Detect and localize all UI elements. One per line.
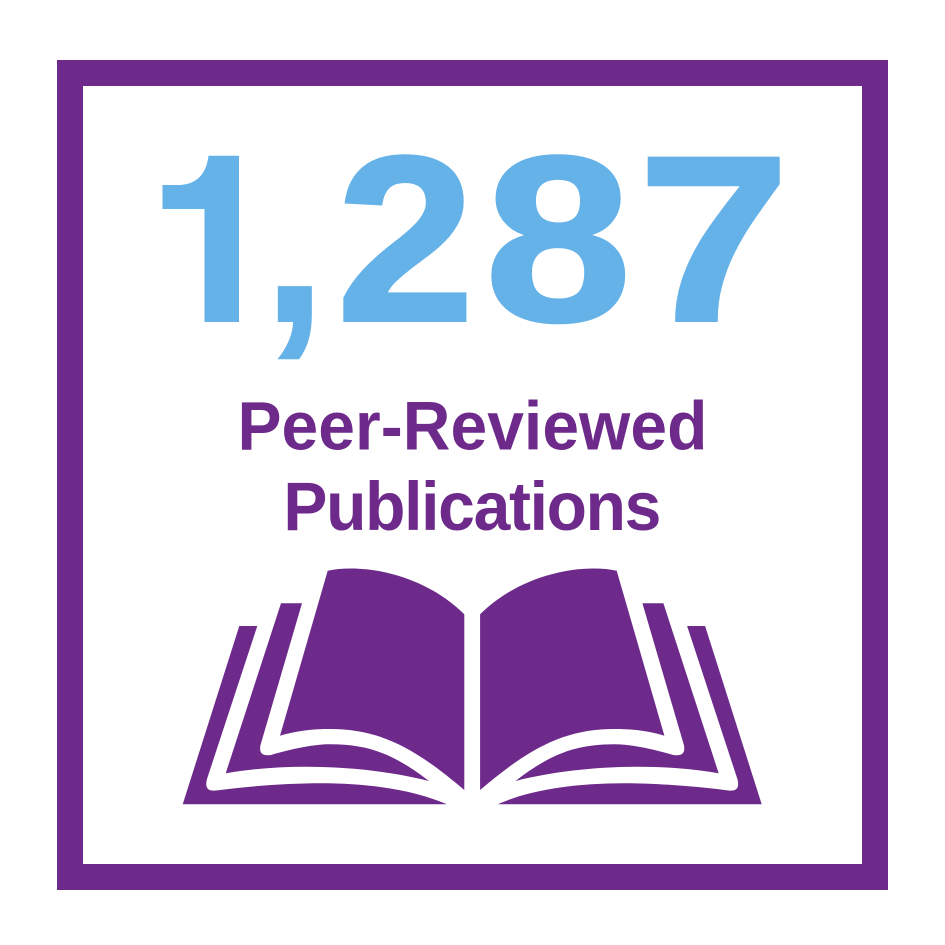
comma: , [261, 105, 328, 374]
left middle pages [226, 603, 429, 781]
left outer pages [183, 626, 447, 804]
panel: purple square frame [70, 73, 875, 877]
digit 1: 1 [150, 105, 284, 374]
left page [280, 568, 464, 790]
icon: open book [183, 568, 762, 804]
digit 7: 7 [638, 108, 790, 371]
infographic [57, 60, 888, 890]
digit 1 [162, 156, 239, 322]
digit 2: 2 [336, 107, 475, 371]
right pages [480, 568, 762, 804]
label: Publications: Publications [283, 469, 661, 545]
big number [162, 154, 780, 360]
digit 8: 8 [485, 108, 632, 371]
label: Peer-Reviewed: Peer-Reviewed [238, 388, 708, 465]
